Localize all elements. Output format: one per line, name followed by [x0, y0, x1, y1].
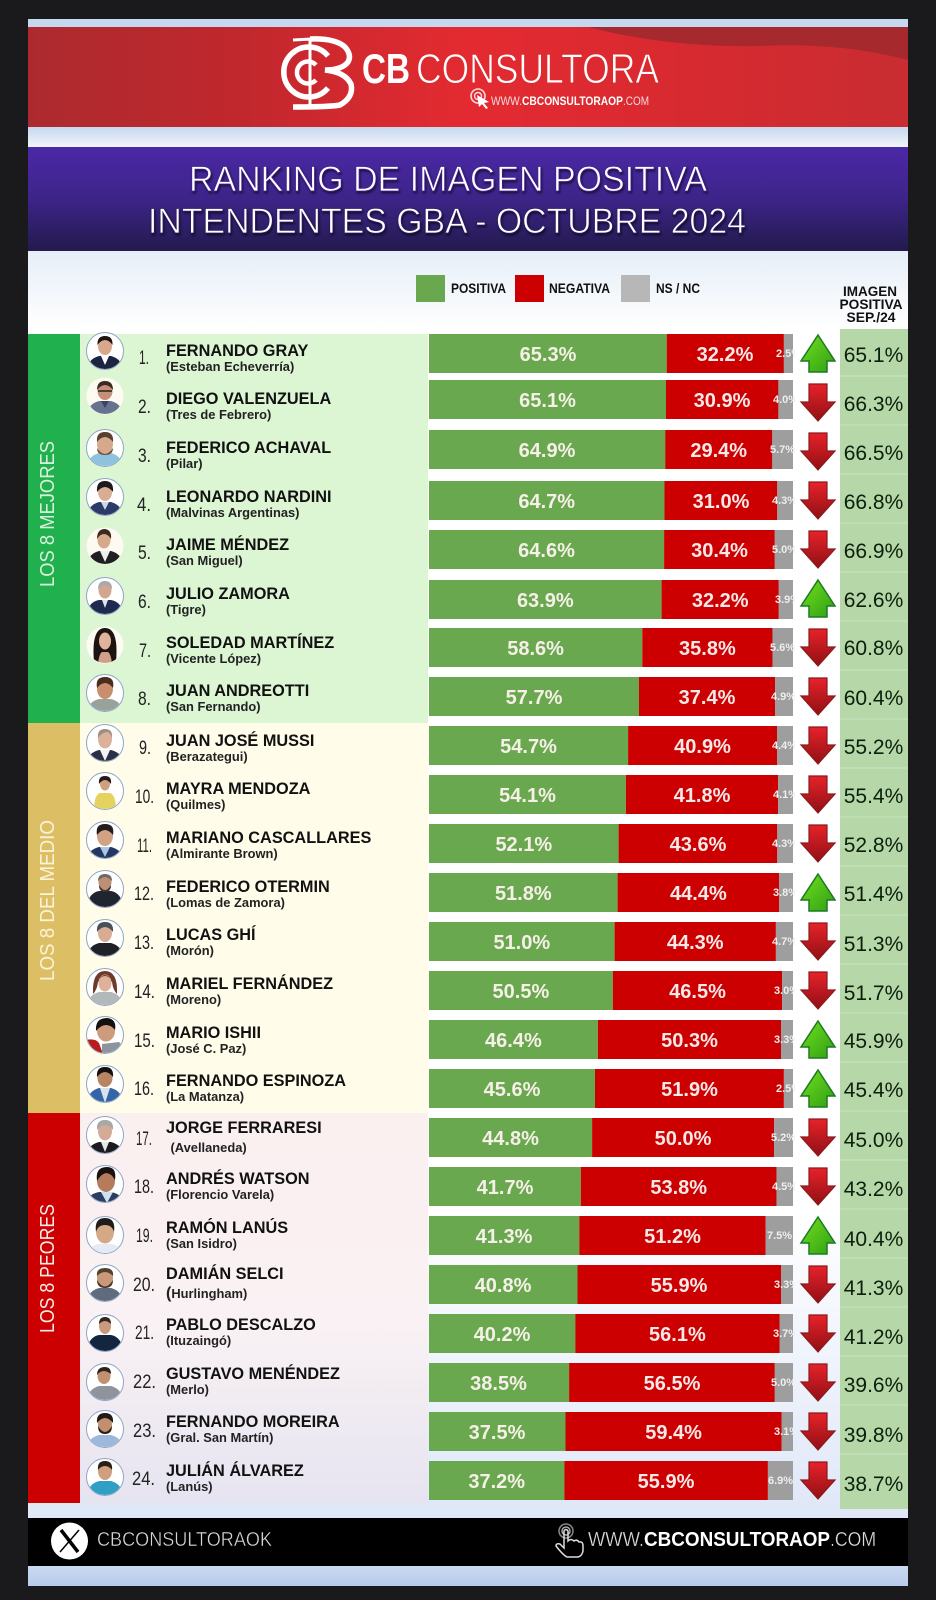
bar: 51.8% [495, 883, 552, 905]
bar: 5.2% [771, 1132, 796, 1144]
photo [86, 822, 124, 859]
municipality: (La Matanza) [166, 1089, 244, 1104]
header banner: logo [28, 27, 908, 127]
municipality: (Quilmes) [166, 797, 225, 812]
logo monogram [284, 39, 352, 107]
previous value: 66.9% [844, 540, 903, 563]
arrow down [801, 678, 835, 715]
arrow down [801, 972, 835, 1009]
arrow down [801, 629, 835, 666]
bar: 4.7% [772, 936, 797, 948]
name: FERNANDO GRAY [166, 342, 308, 360]
rank: 21. [135, 1323, 154, 1344]
municipality: (José C. Paz) [166, 1041, 246, 1056]
previous value: 45.4% [844, 1079, 903, 1102]
name: DAMIÁN SELCI [166, 1264, 284, 1283]
bar: 3.8% [773, 887, 798, 899]
legend: NEGATIVA [549, 280, 610, 296]
municipality: (Vicente López) [166, 651, 261, 666]
arrow down [801, 1462, 835, 1499]
rank: 19. [136, 1226, 153, 1247]
bar [429, 580, 800, 619]
section label: LOS 8 DEL MEDIO [37, 820, 59, 981]
bar: 4.5% [772, 1181, 797, 1193]
previous value: 45.0% [844, 1129, 903, 1152]
rank: 1. [139, 348, 149, 369]
section label: LOS 8 PEORES [37, 1204, 59, 1333]
name: LUCAS GHÍ [166, 925, 256, 944]
rank: 9. [139, 738, 151, 759]
row 3 [86, 430, 903, 471]
rank: 10. [135, 787, 154, 808]
name: FERNANDO MOREIRA [166, 1413, 340, 1431]
legend [416, 275, 700, 302]
bar: 40.2% [474, 1324, 531, 1346]
bar: 46.5% [669, 981, 726, 1003]
bar: 44.8% [482, 1128, 539, 1150]
photo [86, 478, 124, 516]
arrow down [801, 1315, 835, 1352]
bar [429, 1314, 798, 1353]
bar: 29.4% [690, 440, 747, 462]
bar: 54.7% [500, 736, 557, 758]
bar: 64.9% [519, 440, 576, 462]
bar [429, 380, 798, 419]
column heading: previous month [840, 283, 902, 325]
previous value: 66.8% [844, 491, 903, 514]
photo [86, 920, 124, 957]
bar [429, 1461, 793, 1500]
municipality: (Lomas de Zamora) [166, 895, 285, 910]
bar: 38.5% [470, 1373, 527, 1395]
previous value: 66.3% [844, 393, 903, 416]
municipality: (Almirante Brown) [166, 846, 278, 861]
bar: 3.1% [774, 1426, 799, 1438]
column heading: previous month: SEP./24 [846, 309, 896, 325]
arrow up [801, 335, 835, 372]
name: FEDERICO OTERMIN [166, 878, 330, 896]
bar: 3.7% [773, 1328, 798, 1340]
bar: 4.9% [771, 691, 796, 703]
bar [429, 873, 798, 912]
rank: 14. [134, 982, 155, 1003]
bar: 4.3% [772, 838, 797, 850]
bar: 65.1% [519, 390, 576, 412]
rank: 11. [137, 836, 152, 857]
rank: 18. [134, 1177, 154, 1198]
bar: 55.9% [651, 1275, 708, 1297]
bar: 2.5% [776, 348, 801, 360]
photo [86, 332, 124, 370]
photo [86, 1066, 124, 1103]
bar: 32.2% [697, 344, 754, 366]
row 16 [86, 1066, 903, 1108]
previous value: 65.1% [844, 344, 903, 367]
bar [429, 430, 795, 469]
icon: cursor click [471, 89, 489, 109]
arrow up [801, 1217, 835, 1254]
row 15 [86, 1016, 903, 1059]
municipality: (Tigre) [166, 602, 206, 617]
bar [429, 1363, 796, 1402]
bar: 4.4% [772, 740, 797, 752]
bar: 37.5% [469, 1422, 526, 1444]
bar [429, 1020, 799, 1059]
name: MARIO ISHII [166, 1024, 261, 1042]
row 13 [86, 920, 903, 961]
bar: 31.0% [693, 491, 750, 513]
bar [429, 971, 799, 1010]
bar: 3.3% [774, 1279, 799, 1291]
name: JULIO ZAMORA [166, 585, 290, 603]
logo wordmark: CONSULTORA [416, 45, 659, 92]
arrow down [801, 1119, 835, 1156]
previous value: 66.5% [844, 442, 903, 465]
municipality: (Ituzaingó) [166, 1333, 231, 1348]
municipality: (Florencio Varela) [166, 1187, 274, 1202]
bar: 5.6% [770, 642, 795, 654]
photo [86, 1216, 124, 1254]
rank: 24. [132, 1469, 155, 1490]
bar: 64.6% [518, 540, 575, 562]
bar [429, 1167, 797, 1206]
name: PABLO DESCALZO [166, 1316, 316, 1334]
previous value: 43.2% [844, 1178, 903, 1201]
arrow down [801, 1364, 835, 1401]
bar: 5.7% [770, 444, 795, 456]
name: JORGE FERRARESI [166, 1119, 322, 1137]
bar: 2.5% [776, 1083, 801, 1095]
bar: 41.7% [477, 1177, 534, 1199]
row 14 [86, 968, 903, 1010]
social handle: CBCONSULTORAOK [97, 1529, 273, 1551]
section: los 8 peores [28, 1113, 428, 1503]
arrow down [801, 1413, 835, 1450]
name: FERNANDO ESPINOZA [166, 1072, 346, 1090]
arrow down [801, 433, 835, 470]
bar: 50.3% [661, 1030, 718, 1052]
name: MARIANO CASCALLARES [166, 829, 371, 847]
website url: CBCONSULTORAOP [644, 1529, 830, 1551]
bar: 46.4% [485, 1030, 542, 1052]
municipality: (Pilar) [166, 456, 203, 471]
bar [429, 1118, 796, 1157]
name: ANDRÉS WATSON [166, 1169, 310, 1188]
municipality: (Hurlingham) [166, 1285, 247, 1302]
icon: pointing hand [556, 1524, 583, 1557]
municipality: (San Miguel) [166, 553, 243, 568]
website url: .COM [830, 1529, 876, 1551]
bar [429, 530, 797, 569]
website url: WWW. [491, 96, 522, 108]
row 4 [86, 478, 903, 520]
photo [86, 724, 124, 762]
arrow down [801, 1168, 835, 1205]
row 9 [86, 724, 903, 765]
icon: X logo [51, 1522, 88, 1560]
name: SOLEDAD MARTÍNEZ [166, 633, 334, 652]
bar: 58.6% [507, 638, 564, 660]
bar [429, 1412, 799, 1451]
bar: 56.5% [644, 1373, 701, 1395]
photo [86, 1116, 124, 1154]
bar: 51.0% [493, 932, 550, 954]
bar: 40.8% [475, 1275, 532, 1297]
previous value: 39.8% [844, 1424, 903, 1447]
photo [86, 1264, 124, 1302]
bar: 44.4% [670, 883, 727, 905]
municipality: (Moreno) [166, 992, 221, 1007]
municipality: (Avellaneda) [170, 1140, 247, 1155]
bar [429, 1216, 793, 1255]
municipality: (Tres de Febrero) [166, 407, 271, 422]
rank: 7. [139, 641, 151, 662]
photo [86, 1410, 124, 1448]
arrow down [801, 384, 835, 421]
row 10 [86, 772, 903, 814]
photo [86, 772, 124, 810]
bar [429, 677, 796, 716]
rank: 23. [133, 1421, 156, 1442]
photo [86, 1016, 124, 1054]
municipality: (Berazategui) [166, 749, 248, 764]
previous value: 60.8% [844, 637, 903, 660]
bar: 37.2% [468, 1471, 525, 1493]
row 18 [86, 1166, 903, 1206]
arrow down [801, 727, 835, 764]
bar: 5.0% [772, 544, 797, 556]
bar: 30.9% [694, 390, 751, 412]
row 17 [86, 1116, 903, 1157]
municipality: (Lanús) [166, 1479, 213, 1494]
row 19 [86, 1216, 903, 1255]
row 11 [86, 822, 903, 863]
bar: 44.3% [667, 932, 724, 954]
bar: 40.9% [674, 736, 731, 758]
name: JUAN ANDREOTTI [166, 682, 309, 700]
bar: 3.0% [774, 985, 799, 997]
row 22 [86, 1363, 903, 1402]
bar [429, 726, 797, 765]
photo [86, 528, 124, 565]
legend: NS / NC [656, 280, 700, 296]
municipality: (San Fernando) [166, 699, 261, 714]
arrow up [801, 580, 835, 617]
rank: 6. [138, 592, 151, 613]
arrow down [801, 1266, 835, 1303]
name: JUAN JOSÉ MUSSI [166, 731, 314, 750]
previous value: 55.4% [844, 785, 903, 808]
name: DIEGO VALENZUELA [166, 390, 331, 408]
previous value: 62.6% [844, 589, 903, 612]
title line 2: INTENDENTES GBA - OCTUBRE 2024 [148, 202, 746, 241]
bar: 56.1% [649, 1324, 706, 1346]
photo [86, 1314, 124, 1352]
rank: 5. [138, 543, 151, 564]
name: GUSTAVO MENÉNDEZ [166, 1364, 340, 1383]
rank: 20. [133, 1275, 155, 1296]
section label: LOS 8 MEJORES [37, 441, 59, 587]
arrow down [801, 776, 835, 813]
name: JULIÁN ÁLVAREZ [166, 1461, 304, 1480]
photo [86, 378, 124, 415]
municipality: (Esteban Echeverría) [166, 359, 294, 374]
bar: 65.3% [520, 344, 577, 366]
bar [429, 481, 797, 520]
bar [429, 1265, 799, 1304]
previous value: 51.4% [844, 883, 903, 906]
arrow up [801, 1070, 835, 1107]
bar: 51.9% [661, 1079, 718, 1101]
rank: 8. [138, 689, 151, 710]
bar: 50.5% [493, 981, 549, 1003]
legend: POSITIVA [451, 280, 506, 296]
row 12 [86, 870, 903, 912]
bar: 59.4% [645, 1422, 702, 1444]
bar: 55.9% [638, 1471, 695, 1493]
bar: 45.6% [484, 1079, 541, 1101]
title line 1: RANKING DE IMAGEN POSITIVA [189, 160, 708, 199]
row 8 [86, 674, 903, 716]
bar: 52.1% [495, 834, 552, 856]
bar: 37.4% [679, 687, 736, 709]
bar [429, 628, 795, 667]
bar: 32.2% [692, 590, 749, 612]
bar: 35.8% [679, 638, 736, 660]
row 1 [86, 332, 903, 374]
rank: 3. [138, 446, 151, 467]
bar: 4.0% [773, 394, 798, 406]
municipality: (Gral. San Martín) [166, 1430, 273, 1445]
photo [86, 578, 124, 615]
bar: 41.3% [476, 1226, 533, 1248]
arrow down [801, 923, 835, 960]
photo [86, 870, 124, 908]
arrow down [801, 825, 835, 862]
row 6 [86, 578, 903, 619]
row 2 [86, 378, 903, 422]
row 5 [86, 528, 903, 569]
photo [86, 430, 124, 467]
bar: 63.9% [517, 590, 574, 612]
previous month column background [840, 329, 908, 1509]
footer band [28, 1518, 908, 1566]
previous value: 45.9% [844, 1030, 903, 1053]
bar: 4.1% [773, 789, 798, 801]
column heading: previous month: IMAGEN [843, 283, 897, 299]
bar: 3.3% [774, 1034, 799, 1046]
rank: 2. [138, 397, 151, 418]
bar: 4.3% [772, 495, 797, 507]
bar: 50.0% [655, 1128, 712, 1150]
row 20 [86, 1264, 903, 1304]
bar: 6.9% [768, 1475, 793, 1487]
bar [429, 334, 801, 373]
arrow down [801, 482, 835, 519]
previous value: 51.7% [844, 982, 903, 1005]
arrow down [801, 531, 835, 568]
name: FEDERICO ACHAVAL [166, 439, 331, 457]
bottom strip [28, 1566, 908, 1586]
previous value: 39.6% [844, 1374, 903, 1397]
name: MAYRA MENDOZA [166, 780, 311, 798]
website url: CBCONSULTORAOP [522, 96, 623, 108]
previous value: 41.2% [844, 1326, 903, 1349]
bar [429, 775, 798, 814]
photo [86, 1166, 124, 1203]
previous value: 55.2% [844, 736, 903, 759]
previous value: 38.7% [844, 1473, 903, 1496]
website url: WWW. [588, 1529, 644, 1551]
bar: 51.2% [644, 1226, 701, 1248]
rank: 13. [134, 933, 154, 954]
bar: 30.4% [691, 540, 748, 562]
bar [429, 824, 797, 863]
name: MARIEL FERNÁNDEZ [166, 974, 333, 993]
name: JAIME MÉNDEZ [166, 535, 289, 554]
title band [28, 147, 908, 251]
bar: 53.8% [650, 1177, 707, 1199]
arrow up [801, 874, 835, 911]
rank: 22. [133, 1372, 156, 1393]
row 24 [86, 1458, 903, 1500]
municipality: (San Isidro) [166, 1236, 237, 1251]
bar: 41.8% [674, 785, 731, 807]
rank: 4. [137, 495, 151, 516]
rank: 17. [136, 1129, 152, 1150]
name: LEONARDO NARDINI [166, 488, 332, 506]
previous value: 52.8% [844, 834, 903, 857]
previous value: 40.4% [844, 1228, 903, 1251]
previous value: 60.4% [844, 687, 903, 710]
bar: 5.0% [771, 1377, 796, 1389]
municipality: (Malvinas Argentinas) [166, 505, 299, 520]
photo [86, 626, 124, 664]
name: RAMÓN LANÚS [166, 1218, 288, 1237]
previous value: 41.3% [844, 1277, 903, 1300]
website url: .COM [623, 96, 649, 108]
section: los 8 del medio [28, 723, 428, 1113]
bar: 54.1% [499, 785, 556, 807]
bar: 64.7% [518, 491, 575, 513]
photo [86, 968, 124, 1006]
bar [429, 1069, 801, 1108]
row 21 [86, 1314, 903, 1353]
rank: 15. [134, 1031, 155, 1052]
bar [429, 922, 797, 961]
arrow up [801, 1021, 835, 1058]
row 23 [86, 1410, 903, 1451]
municipality: (Merlo) [166, 1382, 209, 1397]
photo [86, 674, 124, 712]
bar: 7.5% [767, 1230, 792, 1242]
bar: 3.9% [775, 594, 800, 606]
previous value: 51.3% [844, 933, 903, 956]
photo [86, 1458, 124, 1496]
row 7 [86, 626, 903, 667]
website url [588, 1529, 876, 1551]
photo [86, 1364, 124, 1401]
rank: 12. [134, 884, 154, 905]
bar: 57.7% [506, 687, 563, 709]
logo wordmark: CB [362, 45, 410, 92]
column heading: previous month: POSITIVA [840, 296, 902, 312]
municipality: (Morón) [166, 943, 214, 958]
bar: 43.6% [670, 834, 727, 856]
section: los 8 mejores [28, 334, 428, 723]
rank: 16. [134, 1079, 154, 1100]
